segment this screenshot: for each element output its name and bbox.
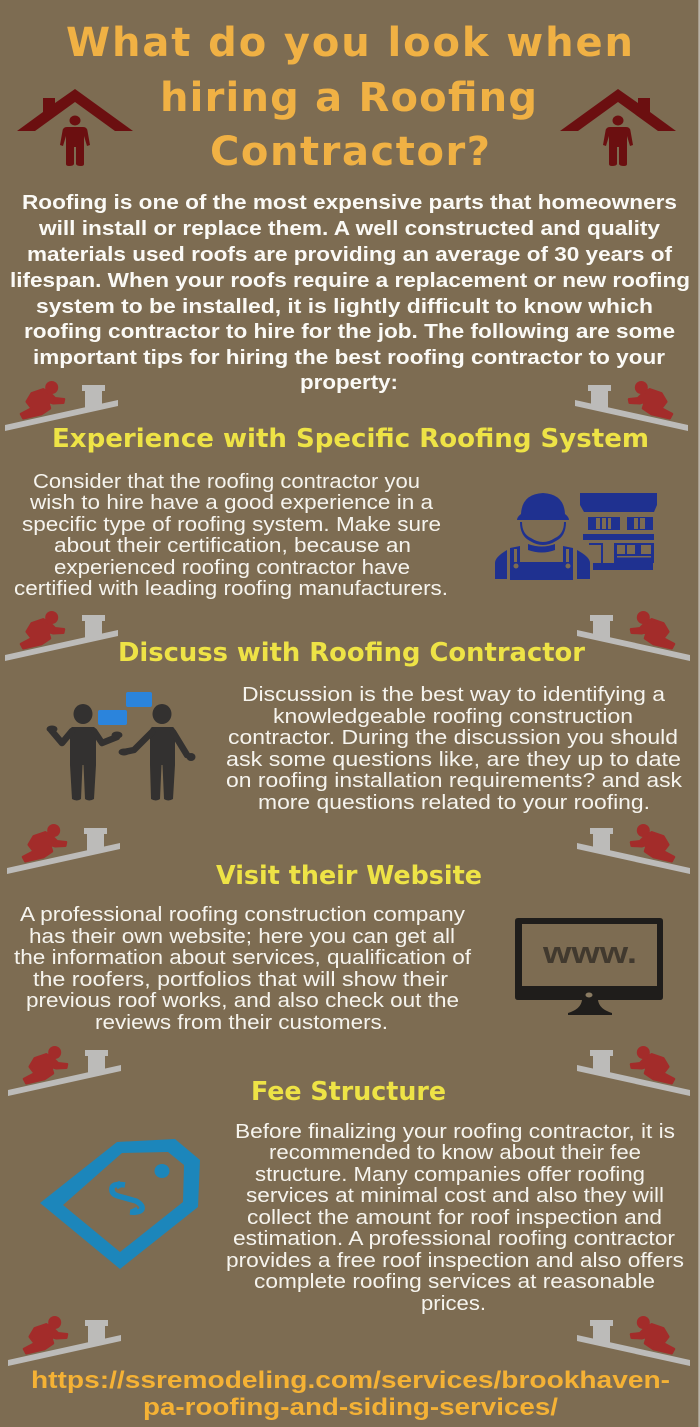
text: website: previous roof works, and also check out the <box>26 990 459 1012</box>
icon: monitor with www <box>515 918 663 1015</box>
text: experience: specific type of roofing system. Make sure <box>22 514 441 536</box>
heading: website: Visit their Website <box>216 861 482 891</box>
text: website <box>14 904 471 1034</box>
intro paragraph: important tips for hiring the best roofing contractor to your <box>33 346 665 369</box>
website url: pa-roofing-and-siding-services/ <box>143 1394 558 1421</box>
text: discuss: on roofing installation requirements? and ask <box>226 770 683 792</box>
intro paragraph: system to be installed, it is lightly difficult to know which <box>36 295 653 318</box>
text: fee structure: Before finalizing your roofing contractor, it is <box>235 1121 675 1143</box>
title: What do you look when <box>66 20 633 66</box>
text: website: A professional roofing construction company <box>20 904 465 926</box>
text: experience: certified with leading roofing manufacturers. <box>14 578 448 600</box>
icon: roofer, row 3 right <box>577 824 690 874</box>
icon: roofer, row 4 right <box>577 1046 690 1096</box>
title: hiring a Roofing <box>160 75 537 121</box>
title: Contractor? <box>210 129 490 175</box>
text: discuss: ask some questions like, are they up to date <box>226 749 681 771</box>
text: fee structure: recommended to know about their fee <box>269 1142 641 1164</box>
heading: discuss: Discuss with Roofing Contractor <box>118 638 585 668</box>
icon: price tag <box>40 1139 200 1269</box>
text: discuss: knowledgeable roofing construction <box>273 706 633 728</box>
text: experience: experienced roofing contractor have <box>54 557 410 579</box>
text: experience: wish to hire have a good experience in a <box>29 492 434 514</box>
intro paragraph: will install or replace them. A well constructed and quality <box>38 217 661 240</box>
intro paragraph <box>10 191 690 394</box>
website url <box>31 1367 670 1421</box>
icon: roofer, row 1 right <box>575 381 688 431</box>
intro paragraph: roofing contractor to hire for the job. The following are some <box>24 320 675 343</box>
intro paragraph: Roofing is one of the most expensive parts that homeowners <box>22 191 677 214</box>
icon: roofer, row 5 right <box>577 1316 690 1366</box>
text: experience: about their certification, because an <box>54 535 411 557</box>
text: website: the roofers, portfolios that will show their <box>33 969 448 991</box>
intro paragraph: property: <box>300 371 398 394</box>
text: discuss: more questions related to your roofing. <box>258 792 650 814</box>
text: experience: Consider that the roofing contractor you <box>33 471 420 493</box>
icon: house with person, left <box>17 89 133 166</box>
heading: fee structure: Fee Structure <box>251 1077 446 1107</box>
website url: https://ssremodeling.com/services/brookhaven- <box>31 1367 670 1394</box>
text: discuss: Discussion is the best way to identifying a <box>242 684 666 706</box>
icon: contractor and building <box>495 493 657 580</box>
text: website: the information about services, qualification of <box>14 947 471 969</box>
text: experience <box>14 471 448 600</box>
icon: roofer, row 3 left <box>7 824 120 874</box>
icon: two men talking <box>46 692 196 800</box>
text: fee structure: collect the amount for roof inspection and <box>247 1207 662 1229</box>
icon: roofer, row 5 left <box>8 1316 121 1366</box>
icon: roofer, row 4 left <box>8 1046 121 1096</box>
text: discuss: contractor. During the discussion you should <box>228 727 678 749</box>
text: fee structure: complete roofing services at reasonable <box>254 1271 655 1293</box>
icon: roofer, row 2 left <box>5 611 118 661</box>
title <box>66 20 633 175</box>
icon: house with person, right <box>560 89 676 166</box>
text: discuss <box>226 684 683 814</box>
intro paragraph: materials used roofs are providing an average of 30 years of <box>27 243 672 266</box>
text: fee structure: services at minimal cost and also they will <box>246 1185 664 1207</box>
text: website: reviews from their customers. <box>95 1012 388 1034</box>
heading: experience: Experience with Specific Roofing System <box>52 424 649 454</box>
intro paragraph: lifespan. When your roofs require a replacement or new roofing <box>10 269 690 292</box>
text: fee structure: estimation. A professional roofing contractor <box>233 1228 675 1250</box>
icon: roofer, row 2 right <box>577 611 690 661</box>
text: website: has their own website; here you can get all <box>29 926 455 948</box>
text: fee structure: prices. <box>421 1293 486 1315</box>
text: fee structure: provides a free roof inspection and also offers <box>226 1250 684 1272</box>
text: fee structure <box>226 1121 684 1315</box>
icon: monitor with www: www. <box>542 935 637 970</box>
text: fee structure: structure. Many companies offer roofing <box>255 1164 645 1186</box>
icon: roofer, row 1 left <box>5 381 118 431</box>
